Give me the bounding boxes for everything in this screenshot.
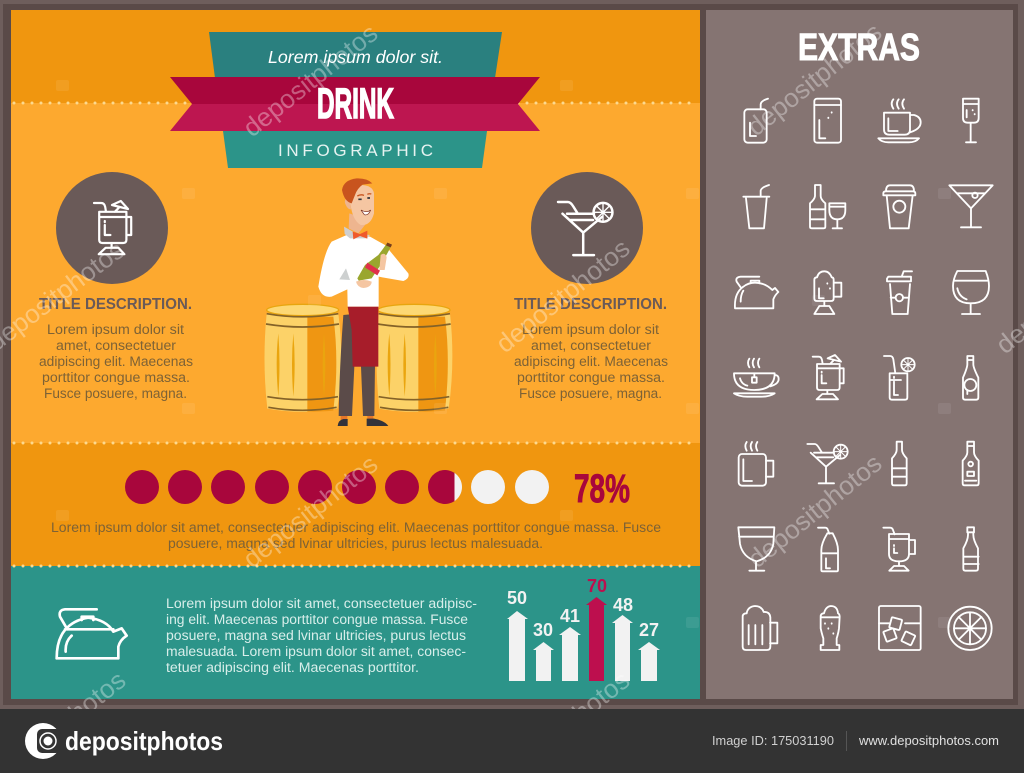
bottom text block: posuere, magna sed lvinar ultricies, purus lectus [166,628,466,643]
logo text: depositphotos [65,726,223,756]
percentage: 78% [574,467,630,511]
arrow bar chart: 70 [587,576,607,596]
bottom text block: malesuada. Lorem ipsum dolor sit amet, consec- [166,644,466,659]
icon: foamy irish coffee [814,271,841,314]
arrow bar chart: 30 [533,620,553,640]
bottom text block: tetuer adipiscing elit. Maecenas porttitor. [166,660,419,675]
image id: Image ID: 175031190 [712,733,834,748]
logo: camera [25,723,61,759]
watermark camera marks [56,80,951,628]
icon: wine glass [953,271,989,314]
website: www.depositphotos.com [858,733,999,748]
heading: TITLE DESCRIPTION. [39,296,192,313]
icon: can [744,99,768,143]
icon: kettle [735,277,778,308]
icon: bottle and glass [810,185,845,228]
bottom text block: ing elit. Maecenas porttitor congue massa. Fusce [166,612,468,627]
panel: right description [514,172,668,401]
text block: adipiscing elit. Maecenas [39,354,193,369]
icon: whisky with ice [879,606,921,650]
text block [39,322,193,401]
icon: coffee cup [878,99,921,142]
illustration: waiter with barrels [264,178,452,426]
title banner [170,32,540,168]
arrow bar chart: 50 [507,588,527,608]
arrow bar chart: 48 [613,595,633,615]
icon grid rows 4 to 7 [734,355,992,650]
arrow bar chart [507,576,660,681]
panel: extras [706,10,1013,699]
watermarks: depositphotos [742,448,887,574]
footer bar [0,709,1024,773]
progress dots [125,470,549,504]
icon: lemonade [884,356,915,400]
icon: champagne bottle [963,527,979,571]
waiter figure [318,178,409,426]
icon: tall bottle [892,442,907,485]
icon: tea cup [734,359,779,397]
text block: Fusce posuere, magna. [44,386,187,401]
text block: porttitor congue massa. [517,370,665,385]
icon: beer mug [743,606,777,650]
panel: main infographic [11,10,700,699]
text block: amet, consectetuer [531,338,652,353]
arrow bar chart: 41 [560,606,580,626]
title: DRINK [317,80,394,128]
icon: martini [949,185,993,227]
icon: kettle [57,609,127,658]
bottom text block: Lorem ipsum dolor sit amet, consectetuer adipisc- [166,596,477,611]
icon: liquor bottle [963,442,979,485]
progress text: Lorem ipsum dolor sit amet, consectetuer adipiscing elit. Maecenas porttitor congue massa. Fusce [51,520,661,535]
icon circle: irish cocktail [56,172,168,284]
panel: left description [39,172,193,401]
text block [514,322,668,401]
subtitle: Lorem ipsum dolor sit. [268,47,443,67]
icon grid rows 1 to 3 [735,99,993,314]
icon: soda cup [743,185,769,228]
watermarks: depositphotos [237,449,383,574]
icon circle: cocktail [531,172,643,284]
right barrel [376,304,452,412]
heading: TITLE DESCRIPTION. [514,296,667,313]
icon: bottle with straw [818,528,838,571]
tagline: INFOGRAPHIC [278,141,433,160]
arrow bar chart: 27 [639,620,659,640]
icon: goblet [738,527,774,571]
icon: coffee to go [883,185,915,228]
progress text: posuere, magna sed lvinar ultricies, purus lectus malesuada. [168,536,543,551]
icon: lidded cup [887,271,912,314]
watermarks: depositphotos [741,17,887,142]
icon: labelled bottle [963,356,978,400]
text block: Lorem ipsum dolor sit [522,322,659,337]
watermarks: depositphotos [237,18,383,143]
icon: champagne flute [963,99,979,142]
icon: hot mug [739,442,773,486]
bottom text block [166,596,477,675]
icon: glass [814,99,841,143]
icon: tall beer [821,606,840,650]
icon: margarita [807,444,848,483]
extras heading: EXTRAS [798,27,920,69]
text block: Fusce posuere, magna. [519,386,662,401]
text block: amet, consectetuer [56,338,177,353]
text block: Lorem ipsum dolor sit [47,322,184,337]
icon: irish cocktail [813,355,844,399]
watermarks: depositphotos [490,233,635,359]
left barrel [264,304,341,412]
icon: citrus slice [948,607,992,650]
progress text [51,520,661,551]
text block: porttitor congue massa. [42,370,190,385]
icon: glass mug with straw [883,528,915,571]
text block: adipiscing elit. Maecenas [514,354,668,369]
